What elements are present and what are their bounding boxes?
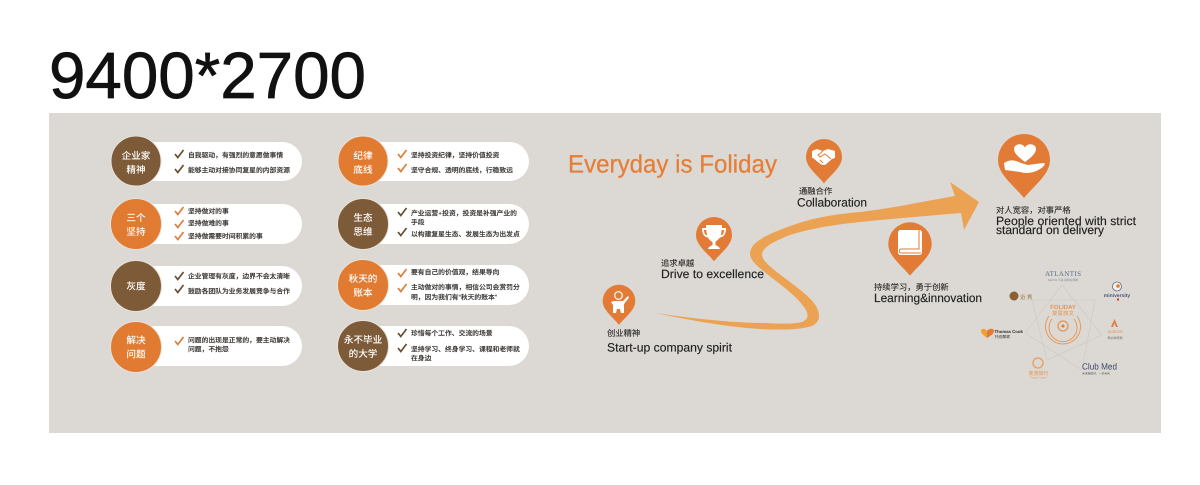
milestone: people oriented: People oriented with strict [996,214,1137,228]
value row: 灰度: 企业管理有灰度，边界不会太清晰 [188,272,290,280]
value row: 秋天的账本: 主动做对的事情，相信公司会赏罚分 [411,284,520,292]
milestone: drive to excellence: 追求卓越 [661,258,695,268]
value row: 企业家精神: 能够主动对接协同复星的内部资源 [188,166,290,174]
value row: 灰度: 灰度 [126,280,146,292]
milestone: start-up company spirit: Start-up company spirit [607,340,733,354]
logo: Albion: 爱必侬度假 [1107,336,1123,340]
value row: 秋天的账本: 账本 [353,287,373,299]
value row: 解决问题: 解决 [126,334,146,346]
milestone: drive to excellence [661,217,764,281]
arrow: winding growth path [655,182,979,330]
logo: Foliday center [1046,304,1080,344]
icon: heart in hand pin [998,134,1050,198]
logo: Thomas Cook: 托迈酷客 [995,334,1010,339]
value row: 纪律底线 [338,136,529,186]
icon: handshake pin [806,139,842,183]
value row: 永不毕业的大学: 永不毕业 [344,334,383,346]
logo: Atlantis [1045,270,1081,282]
value row: 纪律底线: 纪律 [353,150,373,162]
milestone: learning and innovation: Learning&innovation [874,291,982,305]
logo: Atlantis: SANYA 三亚·亚特兰蒂斯 [1048,278,1078,282]
value row: 三个坚持: 坚持做难的事 [188,220,229,228]
icon: book pin [888,222,932,276]
icon: bulb person pin [603,285,635,325]
value row: 纪律底线: 坚持投资纪律，坚持价值投资 [411,152,500,160]
milestone: start-up company spirit: 创业精神 [607,328,640,338]
logo: Fosun Travel [1028,358,1049,380]
value row: 生态思维: 手段 [411,218,425,226]
value row: 永不毕业的大学: 坚持学习、终身学习、课程和老师就 [411,346,520,354]
logo: miniversity [1104,282,1130,300]
milestone: collaboration: Collaboration [797,196,867,210]
value row: 三个坚持: 三个 [126,212,146,224]
value row: 永不毕业的大学 [338,320,529,372]
logo: Thomas Cook [981,329,1024,339]
value row: 永不毕业的大学: 的大学 [349,348,378,360]
logo: Thomas Cook: Thomas Cook [994,329,1024,334]
value row: 企业家精神: 精神 [126,164,146,176]
value row: 秋天的账本: 要有自己的价值观，结果导向 [411,268,500,276]
value row: 生态思维 [338,198,529,250]
logo: brown circle brand: 迈 秀 [1020,294,1033,301]
value row: 三个坚持 [110,198,302,250]
value row: 解决问题: 问题，不抱怨 [188,346,229,354]
heptagram lines [1025,285,1102,370]
logo: Albion: ALBION [1108,329,1122,334]
value row: 秋天的账本 [338,260,529,310]
value row: 永不毕业的大学: 珍惜每个工作、交流的场景 [411,330,493,338]
value row: 企业家精神: 自我驱动，有强烈的意愿做事情 [188,152,283,160]
value row: 三个坚持: 坚持做需要时间积累的事 [188,232,263,240]
value row: 企业家精神 [111,136,302,186]
milestone: people oriented [996,134,1137,237]
value row: 灰度: 鼓励各团队为业务发展竞争与合作 [188,288,290,296]
title: dimensions: 9400*2700 [49,39,366,112]
logo: Atlantis: ATLANTIS [1045,270,1081,278]
value row: 灰度 [110,260,302,312]
milestone: start-up company spirit [603,285,733,354]
value row: 纪律底线: 底线 [353,164,373,176]
milestone: people oriented: 对人宽容，对事严格 [996,205,1071,215]
value row: 解决问题: 问题 [126,350,146,360]
value row: 解决问题 [110,322,302,372]
milestone: drive to excellence: Drive to excellence [661,267,764,281]
logo: Foliday center: FOLIDAY [1050,304,1076,311]
value row: 永不毕业的大学: 在身边 [411,354,432,362]
value row: 秋天的账本: 明，因为我们有“秋天的账本” [411,294,498,302]
value row: 生态思维: 以构建复星生态、发展生态为出发点 [411,230,520,238]
milestone: people oriented: standard on delivery [996,223,1104,237]
value row: 纪律底线: 坚守合规、透明的底线，行稳致远 [411,166,513,174]
panel: grey wall background [49,113,1161,433]
icon: trophy pin [696,217,732,261]
logo: brown circle brand [1010,292,1033,301]
logo: Albion [1107,319,1123,340]
milestone: collaboration [797,139,867,210]
milestone: collaboration: 通融合作 [799,186,832,196]
value row: 生态思维: 生态 [353,212,373,224]
value row: 秋天的账本: 秋天的 [349,273,377,285]
brand ecosystem star diagram [981,270,1130,380]
milestone: learning and innovation [874,222,982,305]
logo: miniversity: miniversity [1104,293,1130,299]
logo: Fosun Travel: 复游旅行 [1028,370,1049,377]
logo: Club Med: Club Med [1082,362,1117,372]
heading: Everyday is Foliday: Everyday is Foliday [568,150,777,178]
logo: Club Med [1082,362,1117,376]
logo: Fosun Travel: Fosun Travel [1030,376,1047,380]
value row: 生态思维: 产业运营+投资，投资是补强产业的 [411,210,517,218]
value row: 解决问题: 问题的出现是正常的，要主动解决 [188,336,290,344]
logo: Club Med: 全球度假村，一价全包 [1082,372,1110,376]
value row: 三个坚持: 坚持做对的事 [188,208,229,216]
milestone: learning and innovation: 持续学习，勇于创新 [874,282,949,292]
value row: 生态思维: 思维 [353,226,373,238]
logo: Foliday center: 复星旅文 [1052,310,1074,317]
value row: 企业家精神: 企业家 [122,150,151,162]
value row: 三个坚持: 坚持 [126,226,146,238]
